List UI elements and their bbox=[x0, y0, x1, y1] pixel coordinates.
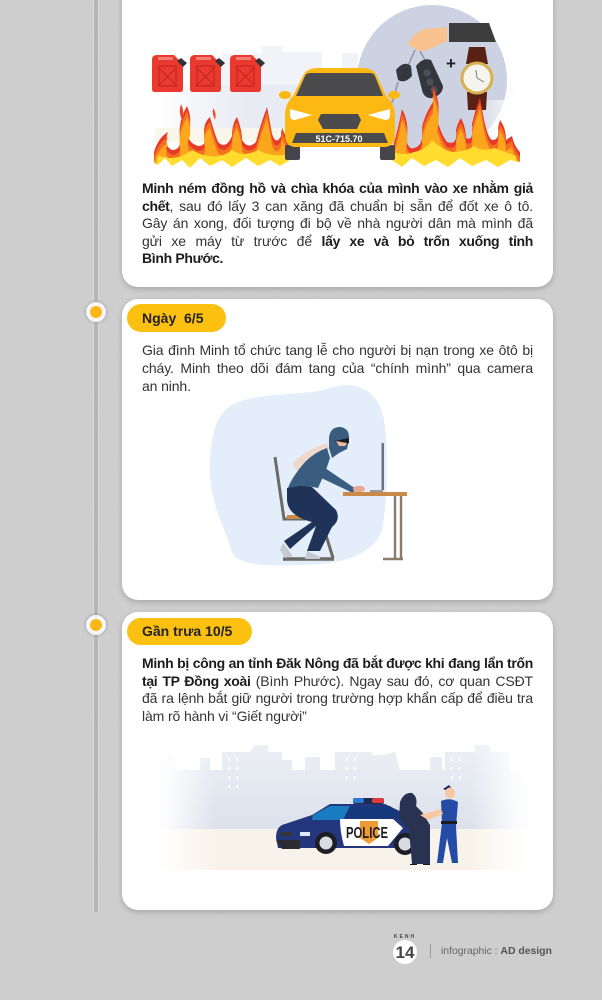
city backdrop bbox=[222, 46, 358, 96]
text block: fire scene: Minh ném đồng hồ và chìa khóa của mình vào xe nhằm giả bbox=[142, 180, 533, 196]
head bbox=[329, 427, 349, 458]
text block: fire scene: gửi xe máy từ trước để lấy xe và bỏ trốn xuống tỉnh bbox=[142, 233, 533, 249]
hand bbox=[407, 27, 447, 51]
logo: Kenh 14 bbox=[393, 934, 417, 964]
jerry can 3 bbox=[230, 55, 265, 92]
logo: Kenh 14: KENH bbox=[394, 934, 416, 940]
car: 51C-715.70 bbox=[315, 134, 363, 144]
key and watch circle bbox=[357, 5, 507, 155]
text block: 6/5: an ninh. bbox=[142, 378, 191, 394]
jerry can 2 bbox=[190, 55, 225, 92]
panel: fire scene bbox=[122, 0, 553, 287]
arrested suspect bbox=[399, 793, 430, 865]
arm bbox=[317, 466, 356, 493]
scarf bbox=[293, 443, 329, 470]
text block: 6/5: Gia đình Minh tổ chức tang lễ cho người bị nạn trong xe ôtô bị bbox=[142, 342, 533, 358]
ground bbox=[155, 829, 530, 870]
police car: POLICE bbox=[346, 825, 388, 842]
text block: fire scene bbox=[142, 180, 534, 266]
illustration: masked man at computer bbox=[210, 385, 407, 566]
panel: 6/5 bbox=[122, 299, 553, 600]
timeline dot 2 bbox=[86, 615, 106, 635]
text block: 6/5: cháy. Minh theo dõi đám tang của “chính mình” qua camera bbox=[142, 360, 533, 376]
divider and credit text: infographic : AD design bbox=[441, 945, 552, 957]
desk bbox=[343, 492, 407, 496]
torso bbox=[288, 448, 330, 488]
text block: 10/5 bbox=[142, 655, 534, 724]
panel: 10/5 bbox=[122, 612, 553, 910]
date label: Ngày 6/5 bbox=[127, 304, 226, 332]
key rings bbox=[408, 50, 425, 66]
car bbox=[279, 68, 400, 160]
timeline line bbox=[93, 0, 99, 912]
keyboard bbox=[370, 490, 383, 492]
flames bbox=[150, 84, 526, 179]
large fob bbox=[416, 59, 443, 98]
desk legs bbox=[383, 496, 403, 559]
text block: fire scene: Bình Phước. bbox=[142, 250, 223, 266]
date label: Gần trưa 10/5 bbox=[127, 618, 252, 645]
watch bbox=[460, 47, 494, 110]
skyline bbox=[155, 745, 530, 830]
sleeve bbox=[449, 23, 496, 42]
logo: Kenh 14: 14 bbox=[396, 943, 414, 962]
date label: Gần trưa 10/5: Gần trưa 10/5 bbox=[142, 623, 232, 639]
small fob bbox=[396, 64, 412, 81]
jerry cans bbox=[152, 55, 187, 92]
ground glow bbox=[155, 128, 295, 142]
footer credit bbox=[393, 934, 552, 964]
legs bbox=[284, 486, 338, 551]
illustration: police arrest bbox=[175, 745, 510, 870]
shoes bbox=[280, 543, 320, 559]
text block: fire scene: chết, sau đó lấy 3 can xăng đã chuẩn bị sẵn để đốt xe ô tô. bbox=[142, 198, 533, 214]
hand bbox=[353, 486, 365, 492]
monitor bbox=[382, 443, 384, 490]
text block: 6/5 bbox=[142, 342, 534, 394]
circle fade bbox=[470, 100, 522, 160]
illustration: burning car bbox=[152, 5, 520, 168]
blob bbox=[210, 385, 387, 565]
text block: 10/5: tại TP Đồng xoài (Bình Phước). Ngay sau đó, cơ quan CSĐT bbox=[142, 673, 533, 689]
plus: + bbox=[446, 54, 456, 73]
text block: 10/5: Minh bị công an tỉnh Đăk Nông đã bắt được khi đang lẩn trốn bbox=[142, 655, 533, 671]
date label: Ngày 6/5: Ngày 6/5 bbox=[142, 310, 203, 326]
timeline dot 1 bbox=[86, 302, 106, 322]
chair bbox=[275, 457, 333, 558]
text block: 10/5: làm rõ hành vi “Giết người” bbox=[142, 708, 307, 724]
haze band bbox=[155, 85, 520, 140]
text block: fire scene: Gây án xong, đối tượng đi bộ về nhà người dân mà mình đã bbox=[142, 215, 533, 231]
text block: 10/5: đã ra lệnh bắt giữ người trong trường hợp khẩn cấp để điều tra bbox=[142, 690, 533, 706]
skyline windows bbox=[228, 758, 461, 788]
side fade bbox=[155, 744, 530, 872]
police car bbox=[276, 798, 416, 855]
police officer bbox=[420, 785, 458, 863]
